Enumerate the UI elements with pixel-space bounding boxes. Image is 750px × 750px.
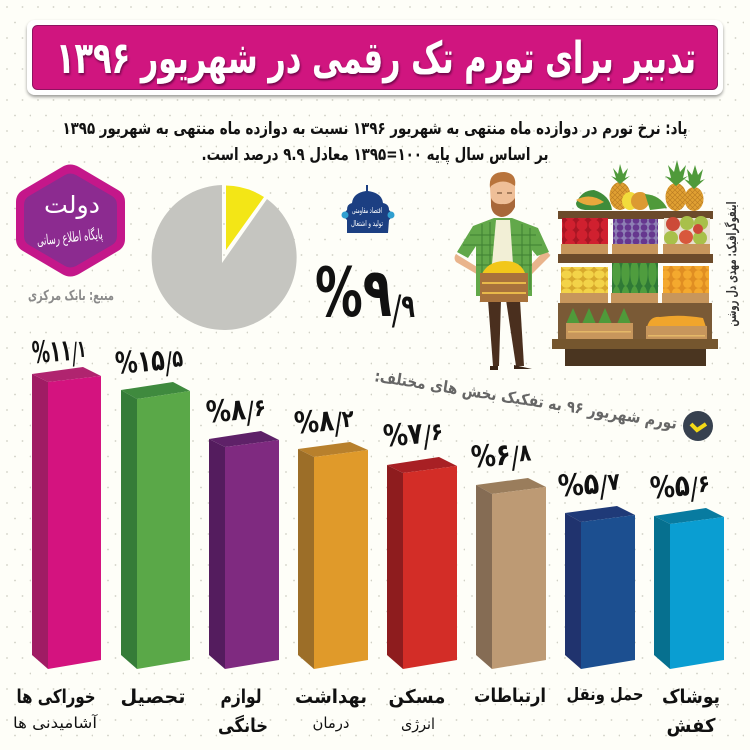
label: clothing <box>662 686 720 737</box>
illustration: fruit stand <box>552 160 718 366</box>
logo: hexagon badge <box>16 164 125 276</box>
top fruits <box>576 190 612 210</box>
bar: health <box>298 442 368 669</box>
value: communications: ۸ <box>518 438 532 467</box>
value: housing: %۷ <box>382 415 433 455</box>
middle board <box>558 254 713 263</box>
forearms <box>454 254 482 276</box>
value: food: %۱۱ <box>31 331 100 371</box>
label: housing: انرژی <box>401 715 435 733</box>
value: transport: %۵ <box>557 466 608 505</box>
illustration: vendor <box>454 172 550 370</box>
big value: %۹ <box>315 254 425 333</box>
pie chart <box>152 185 297 330</box>
title banner <box>27 20 723 95</box>
crate: orange fruit <box>663 266 709 293</box>
label: health <box>295 686 367 732</box>
value: clothing: ۶ <box>697 469 711 498</box>
value: household: %۸ <box>205 391 256 431</box>
value: health: / <box>333 406 345 442</box>
value: household: ۶ <box>253 393 267 422</box>
value: communications: %۶ <box>470 436 521 476</box>
label: food: خوراکی ها <box>16 686 96 708</box>
label: food: آشامیدنی ها <box>13 714 98 732</box>
value: education: %۱۵ <box>114 341 183 382</box>
bar: transport <box>565 506 635 669</box>
value: health: ۲ <box>341 404 355 433</box>
bar: communications <box>476 478 546 669</box>
right leg <box>506 300 524 366</box>
value: transport: / <box>598 469 610 505</box>
label: education: تحصیل <box>120 686 186 708</box>
logo: small blue emblem: اقتصاد مقاومتی <box>352 206 382 215</box>
crate: green fruit <box>612 263 658 293</box>
value: health: %۸ <box>293 402 344 442</box>
counter <box>552 339 718 349</box>
crate: mixed fruit <box>664 216 710 245</box>
bar chart <box>32 367 724 669</box>
label: household: خانگی <box>218 714 268 737</box>
vertical credit: اینفوگرافیک: مهدی دل روشن <box>724 202 740 326</box>
top board <box>558 211 713 219</box>
lower crate right <box>646 326 707 343</box>
crate of bananas <box>481 261 526 276</box>
left leg <box>488 300 501 366</box>
label: household: لوازم <box>220 686 262 708</box>
crate: purple fruit <box>613 219 658 245</box>
oranges <box>647 316 706 327</box>
label: transport: حمل ونقل <box>566 685 644 705</box>
lower crate left <box>566 323 633 343</box>
logo: hexagon badge: پایگاه اطلاع رسانی <box>36 226 104 249</box>
icon: check badge <box>683 411 713 441</box>
value: communications: / <box>510 440 522 476</box>
label: health: بهداشت <box>295 686 367 708</box>
value: clothing: / <box>689 471 701 507</box>
shirt <box>457 218 549 296</box>
value: transport: ۷ <box>606 467 621 496</box>
base <box>565 349 706 366</box>
big value: / <box>392 288 402 334</box>
bar: education <box>121 382 190 669</box>
note text: بر اساس سال پایه ۱۰۰=۱۳۹۵ معادل ۹.۹ درصد است. <box>202 145 549 165</box>
lower cabinet <box>558 303 712 339</box>
logo: hexagon badge: دولت <box>44 191 100 219</box>
label: food <box>13 686 98 732</box>
bar: food <box>32 367 101 669</box>
pie slice: 9.9 percent <box>226 186 264 250</box>
value labels <box>31 332 712 511</box>
bar: clothing <box>654 508 724 669</box>
label: clothing: پوشاک <box>662 686 720 708</box>
value: household: / <box>245 395 257 431</box>
pie slice: rest <box>152 185 297 330</box>
undershirt <box>492 220 513 264</box>
category labels <box>13 685 720 737</box>
value: clothing: %۵ <box>649 467 700 507</box>
head <box>490 172 515 216</box>
section heading <box>373 366 713 441</box>
label: communications: ارتباطات <box>474 685 546 707</box>
label: housing <box>388 686 446 733</box>
logo: small blue emblem: تولید و اشتغال <box>351 219 383 228</box>
value: housing: / <box>422 419 434 455</box>
source label: منبع: بانک مرکزی <box>28 288 114 304</box>
logo: small blue emblem <box>342 185 394 233</box>
big value: ۹ <box>401 287 415 325</box>
section heading text: تورم شهریور ۹۶ به تفکیک بخش های مختلف: <box>373 366 678 433</box>
value: education: / <box>163 346 175 382</box>
value: food: / <box>70 336 80 372</box>
bar: housing <box>387 457 457 669</box>
value: food: ۱ <box>76 335 87 363</box>
crate: yellow fruit <box>561 267 608 293</box>
pineapples tufts <box>566 308 631 324</box>
label: housing: مسکن <box>388 686 446 708</box>
note text: پاد: نرخ تورم در دوازده ماه منتهی به شهریور ۱۳۹۶ نسبت به دوازده ماه منتهی به شهریور ۱۳۹۵ <box>62 119 688 139</box>
label: clothing: کفش <box>666 715 716 737</box>
bar: household <box>209 431 279 669</box>
crate: red fruit <box>562 218 608 245</box>
note text <box>62 119 688 165</box>
label: health: درمان <box>312 714 350 732</box>
label: household <box>218 686 268 737</box>
value: housing: ۶ <box>430 417 444 446</box>
value: education: ۵ <box>171 344 184 373</box>
